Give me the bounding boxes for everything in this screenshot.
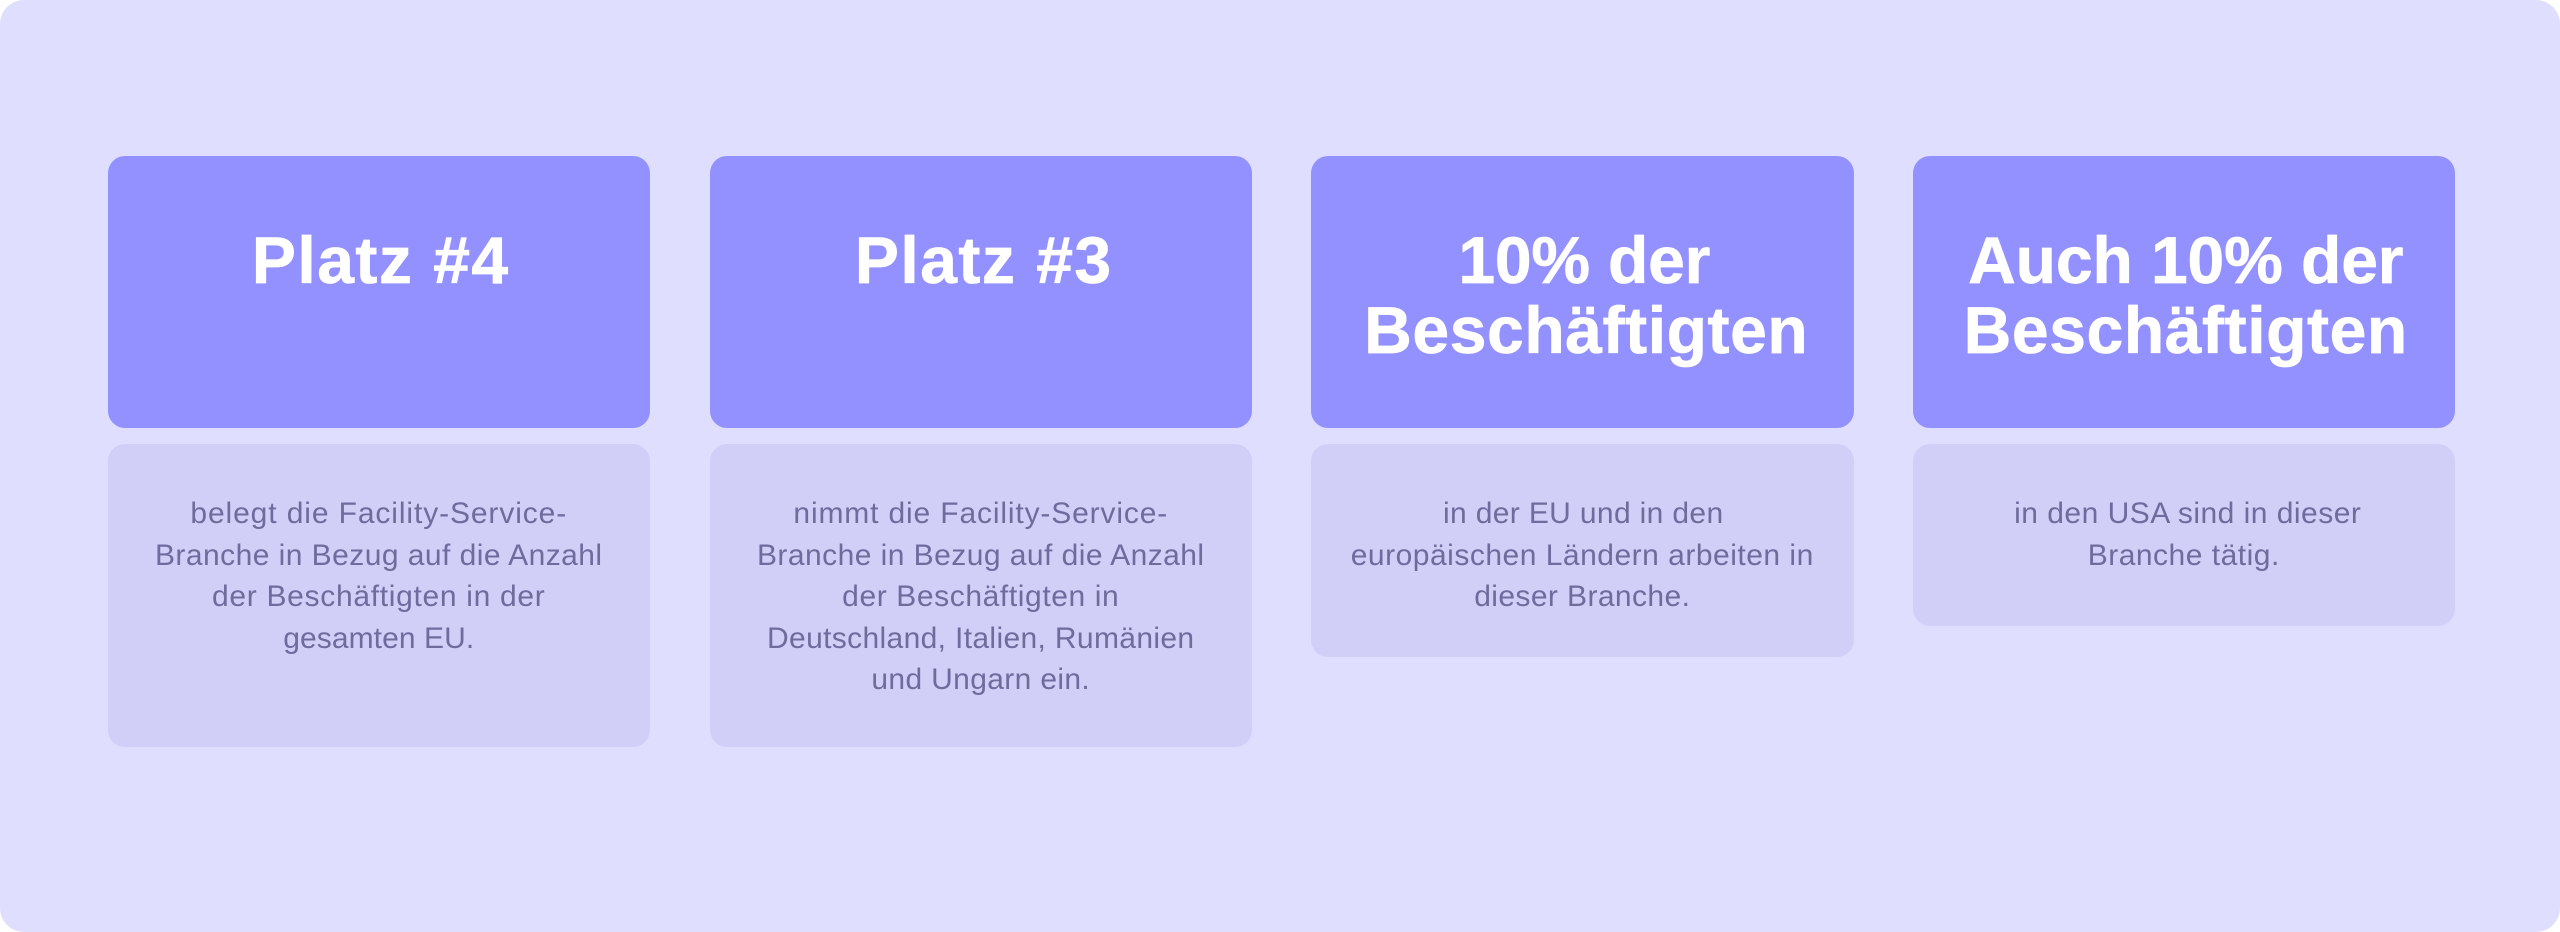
text block: description Platz 3: und Ungarn ein. [871, 663, 1090, 696]
text block: description 10 percent [1351, 497, 1814, 613]
panel: header 10 percent [1311, 156, 1854, 428]
heading: also 10 percent [1964, 222, 2408, 368]
heading: 10 percent [1364, 222, 1808, 368]
heading: 10 percent: Beschäftigten [1364, 293, 1808, 367]
text block: description Platz 4 [155, 497, 603, 654]
text block: description Platz 4: belegt die Facility-Service- [190, 497, 567, 530]
heading: 10 percent: 10% der [1458, 222, 1710, 296]
text block: description Platz 3: Branche in Bezug auf die Anzahl [757, 538, 1205, 572]
text block: description Platz 3: nimmt die Facility-Service- [793, 497, 1168, 530]
panel: description Platz 3 [710, 444, 1252, 746]
text block: description Platz 3: Deutschland, Italien, Rumänien [767, 622, 1194, 654]
heading: also 10 percent: Auch 10% der [1968, 222, 2403, 296]
text block: description also 10 percent: Branche tätig. [2088, 538, 2280, 572]
panel: description Platz 4 [108, 444, 650, 746]
text block: description also 10 percent [2014, 497, 2361, 572]
panel: header Platz 4 [108, 156, 650, 428]
text block: description Platz 3 [757, 497, 1205, 696]
panel: header Platz 3 [710, 156, 1252, 428]
panel: header also 10 percent [1912, 156, 2455, 428]
text block: description 10 percent: europäischen Ländern arbeiten in [1351, 538, 1814, 572]
panel: column also 10 percent [1913, 156, 2455, 626]
panel: column Platz 3 [710, 156, 1252, 747]
text block: description also 10 percent: in den USA sind in dieser [2014, 497, 2361, 530]
text block: description Platz 4: der Beschäftigten in der [212, 580, 545, 613]
panel: description also 10 percent [1912, 444, 2455, 626]
panel: column 10 percent [1311, 156, 1854, 657]
heading: also 10 percent: Beschäftigten [1964, 293, 2408, 367]
text block: description Platz 4: gesamten EU. [283, 622, 474, 654]
heading: Platz 4: Platz #4 [252, 222, 510, 296]
text block: description Platz 3: der Beschäftigten in [842, 580, 1119, 613]
panel: column Platz 4 [108, 156, 650, 747]
text block: description 10 percent: dieser Branche. [1474, 580, 1690, 613]
text block: description 10 percent: in der EU und in den [1443, 497, 1724, 530]
heading: Platz 3: Platz #3 [855, 222, 1113, 296]
text block: description Platz 4: Branche in Bezug auf die Anzahl [155, 538, 603, 572]
panel: description 10 percent [1311, 444, 1854, 657]
